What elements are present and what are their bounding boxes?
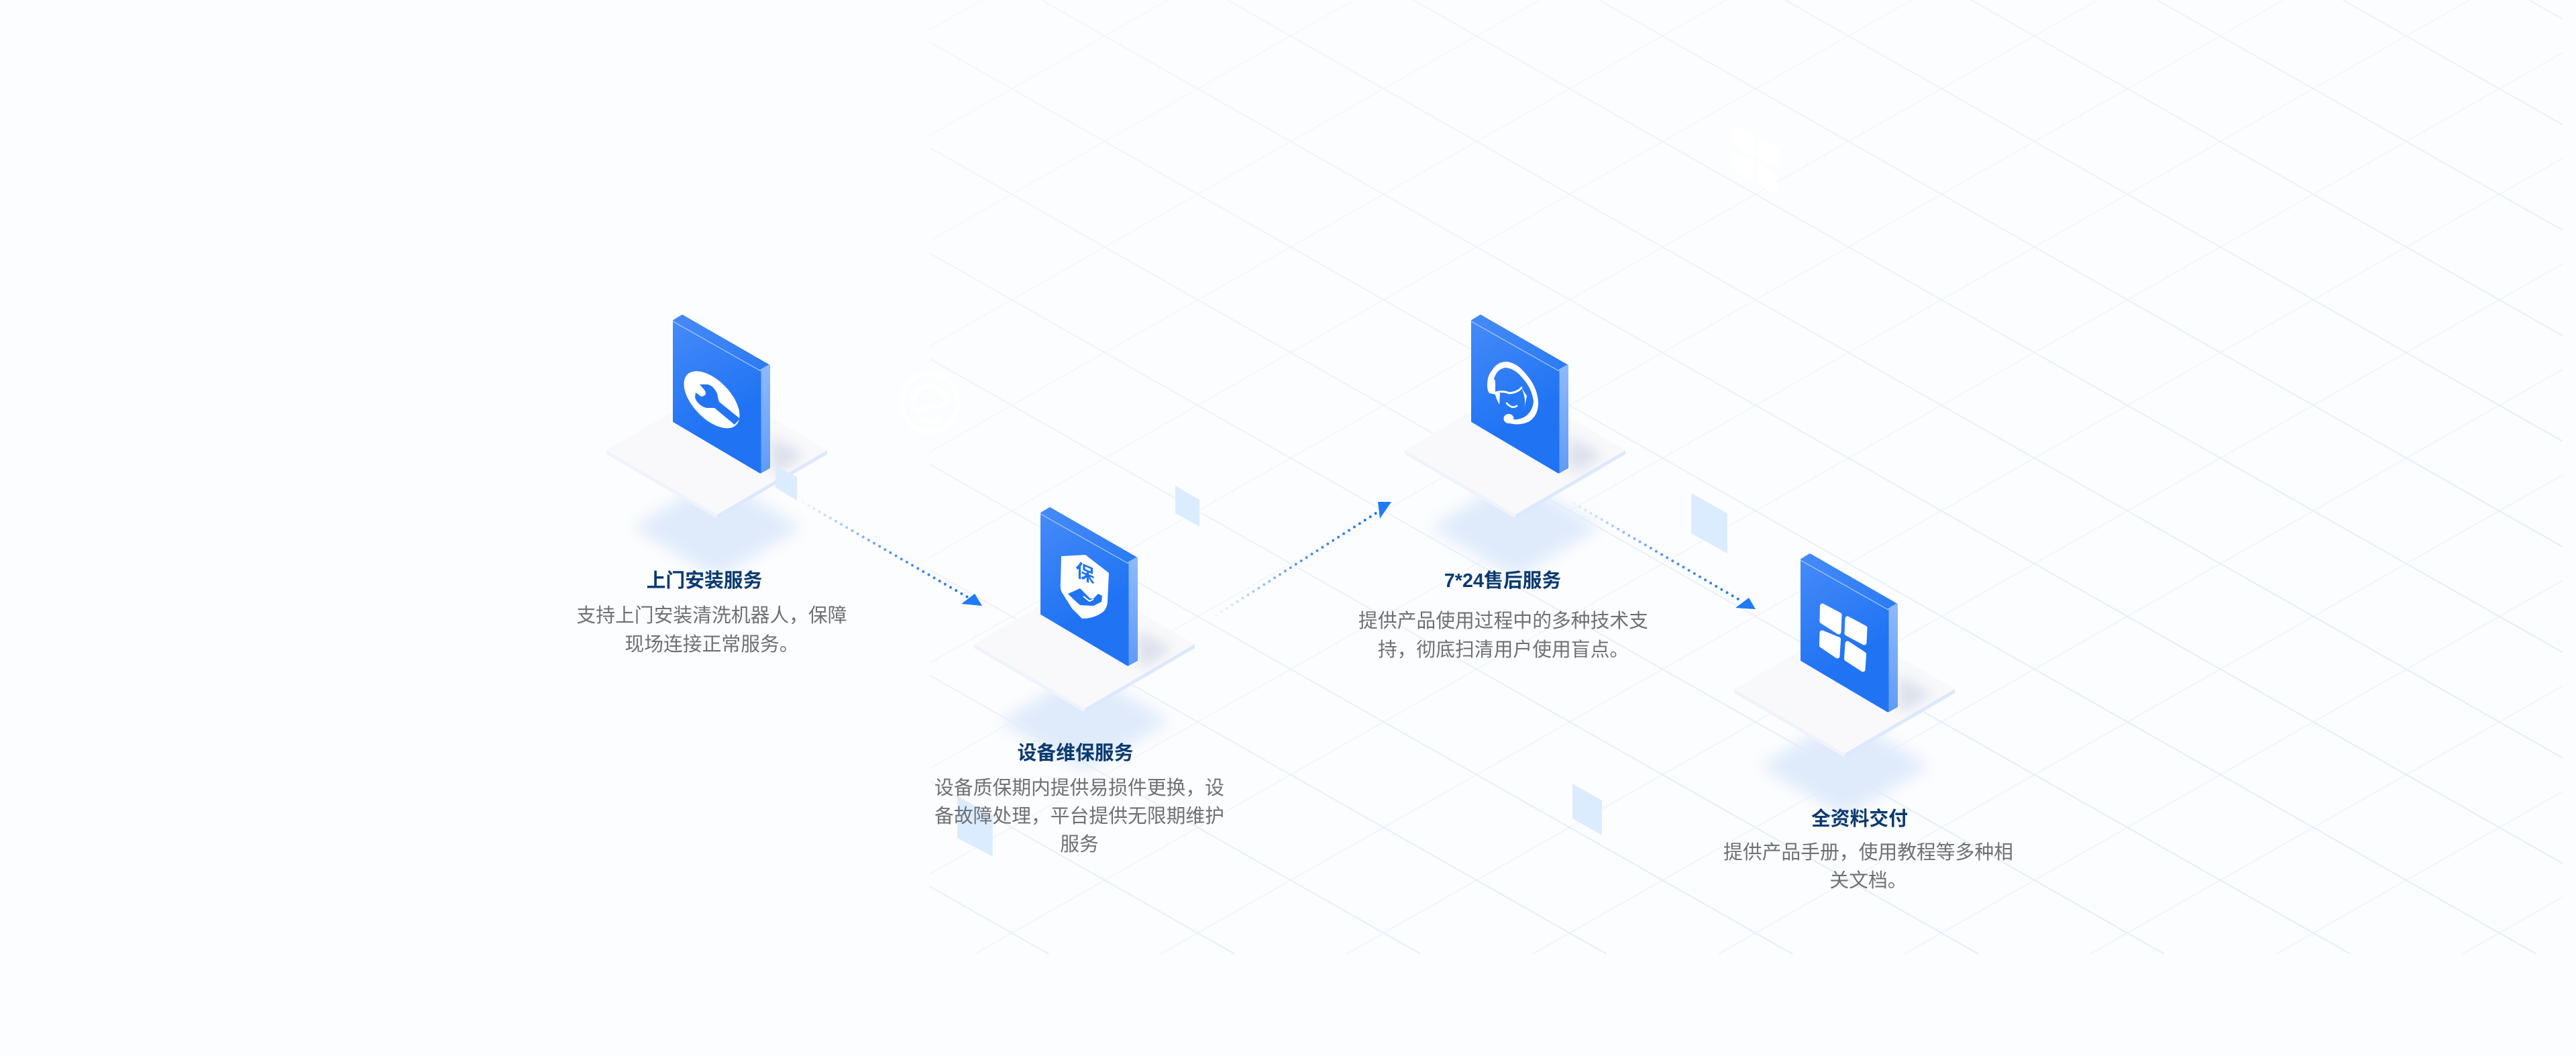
arrow: maintenance to support (1211, 502, 1391, 619)
description (1723, 842, 2013, 892)
description: 现场连接正常服务。 (625, 634, 799, 655)
heading: 全资料交付 (1811, 808, 1908, 830)
icon: ghost headset watermark (902, 374, 958, 434)
icon: four tiles (1822, 606, 1865, 670)
description: 支持上门安装清洗机器人，保障 (576, 605, 847, 627)
description: 备故障处理，平台提供无限期维护 (934, 806, 1224, 827)
description: 持，彻底扫清用户使用盲点。 (1378, 639, 1629, 661)
description: 提供产品手册，使用教程等多种相 (1723, 842, 2013, 863)
description: 设备质保期内提供易损件更换，设 (934, 778, 1224, 799)
panel: 全资料交付 (1723, 554, 2013, 892)
block body (673, 315, 769, 472)
platform with shadow (1734, 625, 1955, 816)
floating tile: right (1691, 493, 1727, 553)
icon: ghost windows watermark (1735, 128, 1778, 192)
description: 关文档。 (1829, 870, 1907, 892)
block body (1471, 315, 1567, 472)
floating tile: centre top (1175, 486, 1199, 527)
platform with shadow (1405, 386, 1625, 577)
description: 服务 (1060, 834, 1099, 855)
floating tile: lower left (957, 796, 993, 857)
icon: headset agent (1487, 362, 1538, 424)
floating tile: beside first platform (775, 466, 797, 500)
heading: 设备维保服务 (1018, 743, 1133, 764)
heading: 7*24售后服务 (1444, 570, 1561, 592)
description (1358, 611, 1648, 661)
panel: 上门安装服务 (576, 315, 847, 655)
platform with shadow (606, 386, 827, 577)
description: 提供产品使用过程中的多种技术支 (1358, 611, 1648, 632)
heading: 上门安装服务 (647, 570, 762, 592)
description (576, 605, 847, 655)
panel: 设备维保服务 (934, 509, 1224, 855)
block body (1040, 509, 1136, 665)
platform with shadow (974, 580, 1195, 771)
icon: wrench (684, 360, 740, 439)
icon: shield with hand: 保 (1076, 559, 1094, 588)
floating tile: centre bottom (1572, 784, 1602, 835)
description (934, 778, 1224, 855)
icon: shield with hand (1061, 555, 1109, 619)
arrow: install to maintenance (798, 499, 982, 606)
arrow: support to documents (1569, 500, 1756, 609)
block body (1801, 554, 1897, 711)
panel: 7*24售后服务 (1358, 315, 1648, 661)
